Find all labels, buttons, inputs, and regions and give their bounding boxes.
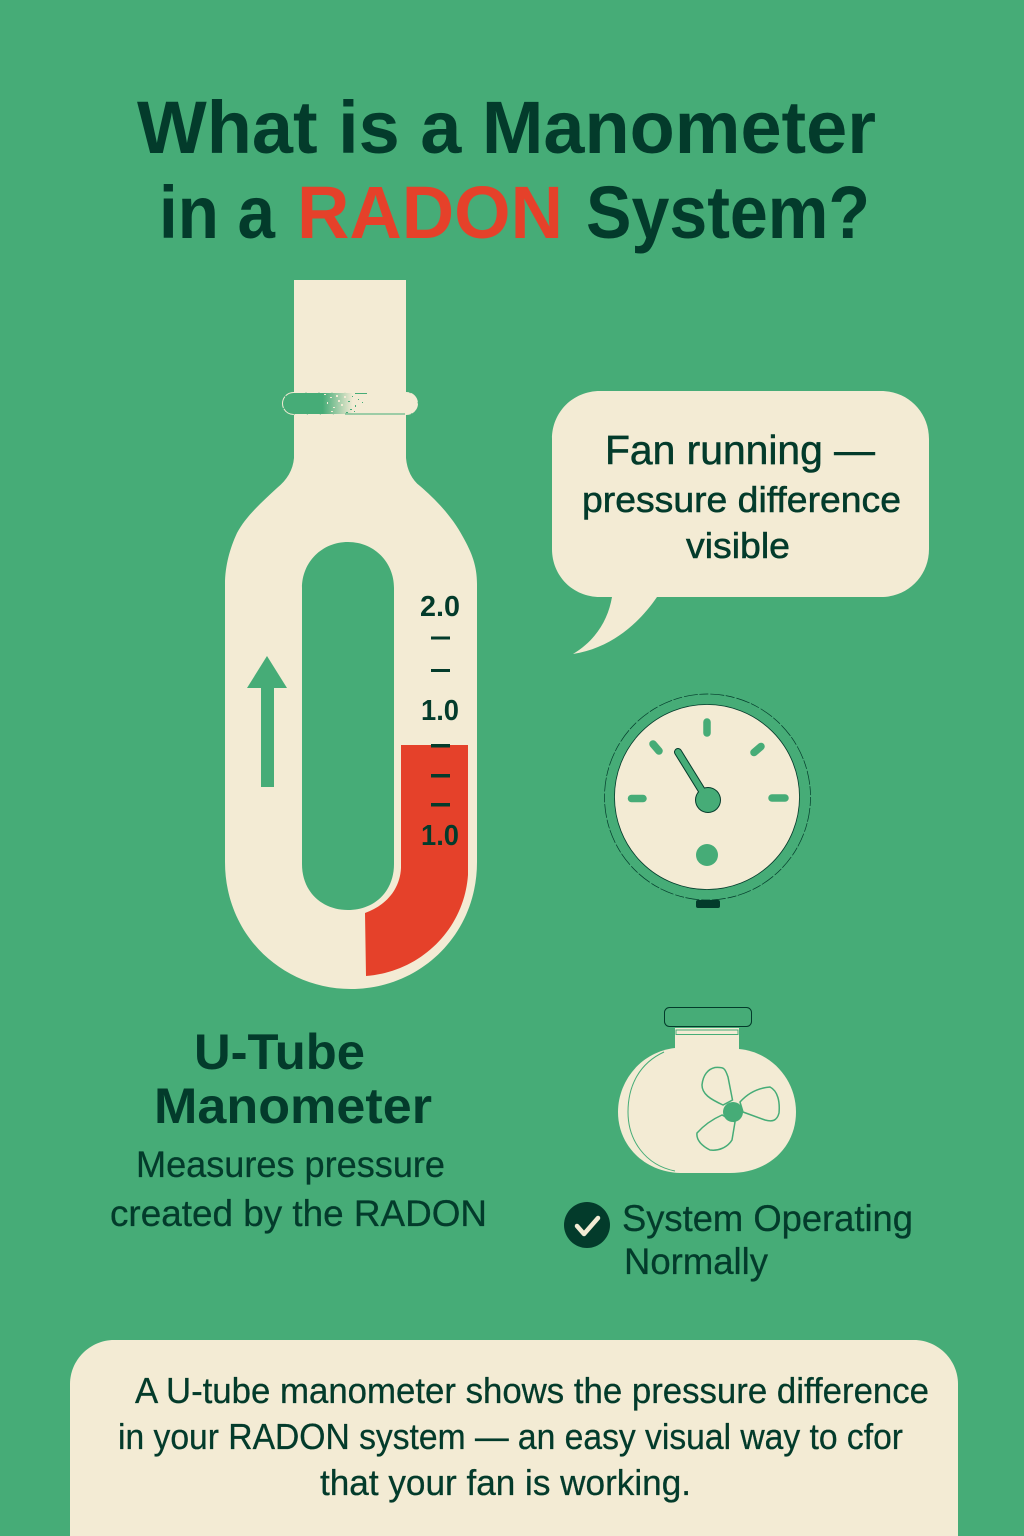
U-tube caption [110, 1024, 487, 1234]
icon: check badge [564, 1202, 610, 1248]
status: system operating normally: Normally [624, 1241, 768, 1282]
title: in a [159, 171, 276, 254]
status: system operating normally [564, 1198, 913, 1282]
bottom summary panel [70, 1340, 958, 1536]
speech bubble callout: visible [686, 525, 790, 566]
scale: 2.0 [420, 591, 460, 623]
scale [420, 591, 460, 852]
U-tube caption: Manometer [154, 1078, 432, 1134]
U-tube manometer illustration [225, 280, 477, 989]
bottom summary panel: in your RADON system — an easy visual way to cfor [118, 1416, 903, 1457]
U-tube caption: U-Tube [194, 1024, 365, 1080]
fan blades [697, 1067, 779, 1150]
pressure gauge [604, 694, 810, 908]
up arrow [247, 656, 287, 787]
red fluid [365, 745, 468, 976]
tube body [225, 280, 477, 989]
speech bubble callout: Fan running — [605, 427, 875, 473]
gauge needle [678, 752, 721, 813]
scale: 1.0 [421, 695, 459, 727]
bottom summary panel: that your fan is working. [320, 1462, 691, 1503]
title: What is a Manometer [137, 86, 876, 169]
gauge ticks [632, 722, 785, 798]
fan housing icon [618, 1008, 796, 1173]
title: RADON [297, 171, 563, 254]
title: System? [586, 171, 870, 254]
scale: 1.0 [421, 820, 459, 852]
U-tube caption: created by the RADON [110, 1193, 487, 1234]
speech bubble callout: pressure difference [582, 479, 901, 520]
status: system operating normally: System Operating [622, 1198, 913, 1239]
title [137, 86, 876, 254]
bottom summary panel: A U-tube manometer shows the pressure difference [135, 1370, 929, 1411]
speech bubble callout [552, 391, 929, 654]
neck ring [282, 392, 418, 414]
U-tube caption: Measures pressure [136, 1144, 445, 1185]
